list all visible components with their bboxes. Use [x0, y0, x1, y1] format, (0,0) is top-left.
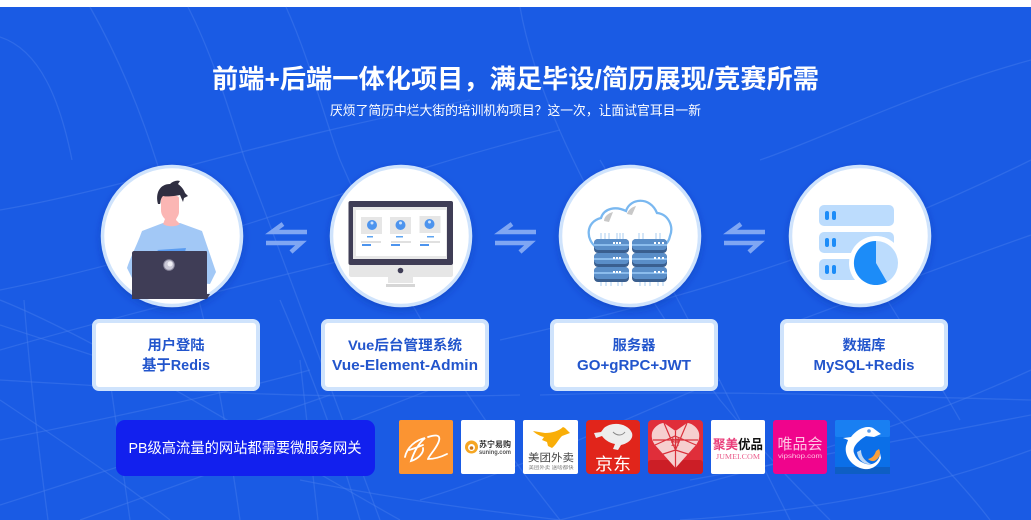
logo: suning: suning.com — [479, 450, 511, 456]
logo: pinduoduo: 拼 — [671, 436, 680, 447]
icon: monitor dashboard — [332, 166, 470, 306]
logo: vipshop — [773, 420, 827, 474]
label card: user login — [94, 321, 258, 389]
arrow: exchange 2 — [495, 224, 536, 252]
logo: jd: 京东 — [595, 455, 631, 474]
label card: admin system — [323, 321, 487, 389]
label card: server: GO+gRPC+JWT — [577, 357, 691, 374]
callout: gateway pill: PB级高流量的网站都需要微服务网关 — [128, 440, 362, 457]
subtitle: 厌烦了简历中烂大街的培训机构项目？这一次，让面试官耳目一新 — [330, 103, 701, 118]
panel: user login — [94, 166, 258, 389]
label card: database: 数据库 — [842, 337, 886, 353]
icon: database with pie chart — [790, 166, 930, 306]
label card: server — [552, 321, 716, 389]
label card: admin system: Vue后台管理系统 — [348, 337, 462, 353]
logo: suning — [461, 420, 515, 474]
label card: server: 服务器 — [612, 337, 656, 353]
logo: meituan waimai: 美团外卖 送啥都快 — [528, 464, 574, 471]
label card: database — [782, 321, 946, 389]
icon: developer with laptop — [102, 166, 242, 306]
logo: vipshop: vipshop.com — [778, 453, 822, 460]
logo: jd — [586, 420, 640, 474]
logo: jumei: JUMEI.COM — [716, 453, 761, 461]
label card: database: MySQL+Redis — [814, 357, 914, 374]
panel: server — [552, 166, 716, 389]
logo: vipshop: 唯品会 — [778, 436, 822, 453]
logo: meituan waimai — [523, 420, 578, 474]
arrow: exchange 1 — [266, 224, 307, 252]
label card: user login: 基于Redis — [142, 356, 210, 374]
title: 前端+后端一体化项目，满足毕设/简历展现/竞赛所需 — [212, 64, 819, 94]
panel: admin system — [323, 166, 487, 389]
panel: database — [782, 166, 946, 389]
logo: suning: 苏宁易购 — [479, 439, 511, 449]
label card: admin system: Vue-Element-Admin — [332, 357, 478, 374]
logo: jumei: 聚美 — [713, 437, 738, 452]
logo: jumei — [711, 420, 765, 474]
logo: pinduoduo — [648, 420, 703, 474]
icon: cloud servers — [560, 166, 700, 306]
callout: gateway pill — [116, 420, 375, 476]
logo: jumei: 优品 — [738, 437, 763, 452]
arrow: exchange 3 — [724, 224, 765, 252]
logo: alibaba — [399, 420, 453, 474]
logo: meituan waimai: 美团外卖 — [528, 451, 574, 464]
label card: user login: 用户登陆 — [148, 337, 204, 353]
logo: ctrip dolphin — [835, 420, 890, 474]
